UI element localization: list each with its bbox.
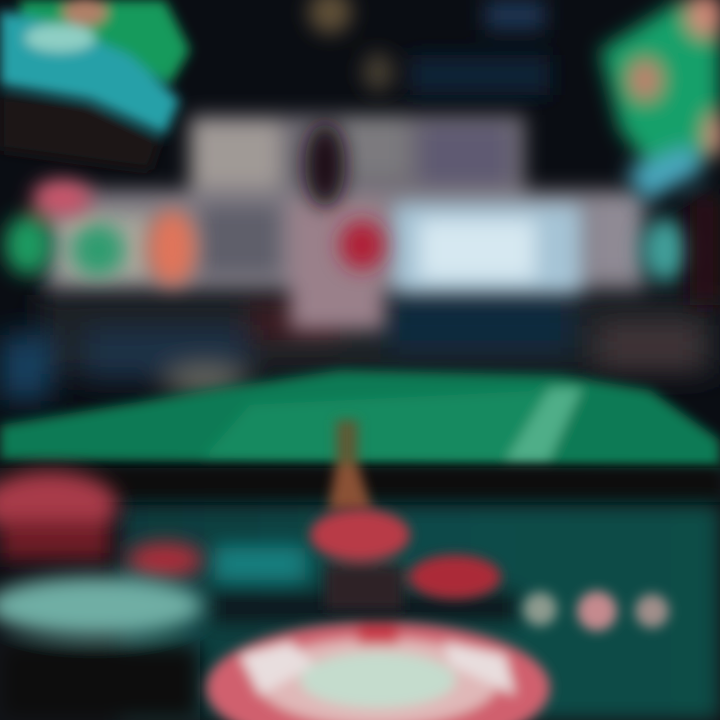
red chip stack left	[0, 471, 203, 578]
hat top left	[0, 0, 190, 170]
large poker chip foreground	[206, 622, 550, 720]
bottle	[328, 420, 372, 510]
cards top right	[600, 0, 720, 305]
pale teal chip left	[0, 576, 203, 720]
green poker table	[0, 370, 720, 468]
table edge	[0, 468, 720, 502]
banner wall	[45, 115, 645, 330]
lower teal felt	[120, 505, 720, 720]
red chips centre	[310, 509, 501, 610]
ceiling lights	[308, 0, 550, 95]
banner accents	[4, 123, 689, 286]
small chips right	[523, 591, 669, 631]
crowd behind table	[0, 295, 720, 400]
